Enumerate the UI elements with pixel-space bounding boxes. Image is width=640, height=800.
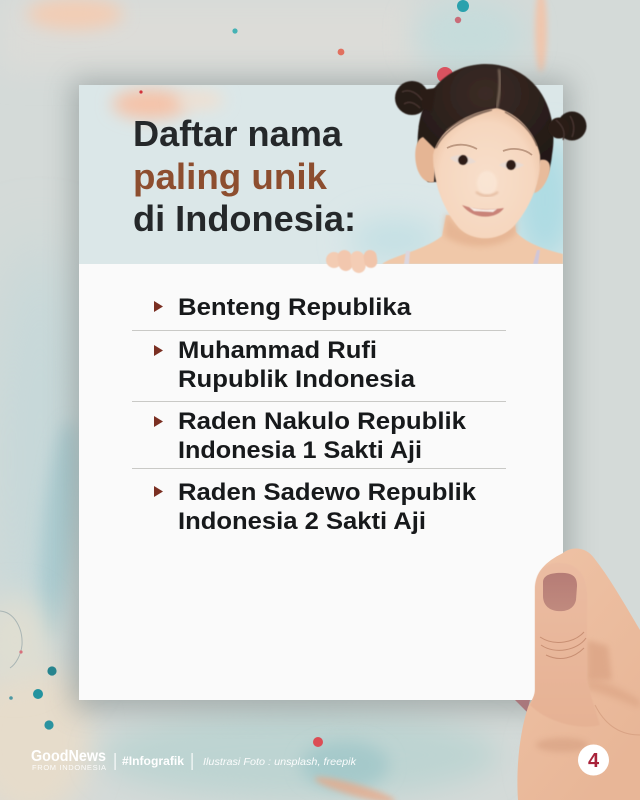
item 4: Raden Sadewo Republik (178, 479, 477, 506)
paint dots (0, 0, 469, 747)
item 1: Benteng Republika (178, 294, 412, 321)
footer credits (31, 748, 357, 772)
item 3 (154, 408, 467, 464)
hand shading (538, 641, 640, 752)
left ear (415, 137, 436, 182)
knuckle creases (540, 632, 586, 659)
hair back (418, 64, 553, 182)
hair parting (497, 69, 500, 108)
fringe wisps (436, 110, 537, 148)
item 4 (154, 479, 477, 535)
card shadow (72, 80, 570, 710)
illustration: hand holding card (515, 549, 640, 800)
left hair bun (395, 81, 436, 115)
panel: white card body (79, 264, 563, 700)
red paint dot behind hair (437, 67, 453, 83)
illustration: girl photo (326, 64, 586, 274)
smile (462, 205, 504, 217)
item 3: Raden Nakulo Republik (178, 408, 467, 435)
nose (477, 171, 497, 195)
item 4: Indonesia 2 Sakti Aji (178, 508, 426, 535)
thumb (530, 563, 600, 727)
page number badge (578, 744, 609, 776)
hashtag: #Infografik (122, 756, 185, 768)
title: Daftar nama (133, 113, 343, 154)
title (133, 113, 356, 239)
item 2: Muhammad Rufi (178, 337, 377, 364)
page number badge: 4 (588, 750, 600, 772)
eyebrows (447, 145, 477, 149)
logo: FROM INDONESIA (32, 763, 106, 772)
eyes (450, 155, 524, 170)
thumbnail (543, 573, 577, 611)
fingers over card edge (326, 249, 378, 274)
item 2 (154, 337, 416, 393)
palm and fingers (517, 549, 640, 800)
panel: header background (79, 85, 577, 265)
right hair bun (548, 112, 586, 140)
shoulders and neck (382, 212, 563, 264)
right ear (534, 160, 550, 193)
photo credit: Ilustrasi Foto : unsplash, freepik (203, 757, 357, 768)
item 2: Rupublik Indonesia (178, 366, 416, 393)
logo (31, 748, 106, 772)
title: paling unik (133, 156, 328, 197)
list of unique names (132, 294, 506, 535)
face (433, 108, 540, 238)
item 3: Indonesia 1 Sakti Aji (178, 437, 422, 464)
title: di Indonesia: (133, 198, 356, 239)
logo: GoodNews (31, 748, 106, 765)
